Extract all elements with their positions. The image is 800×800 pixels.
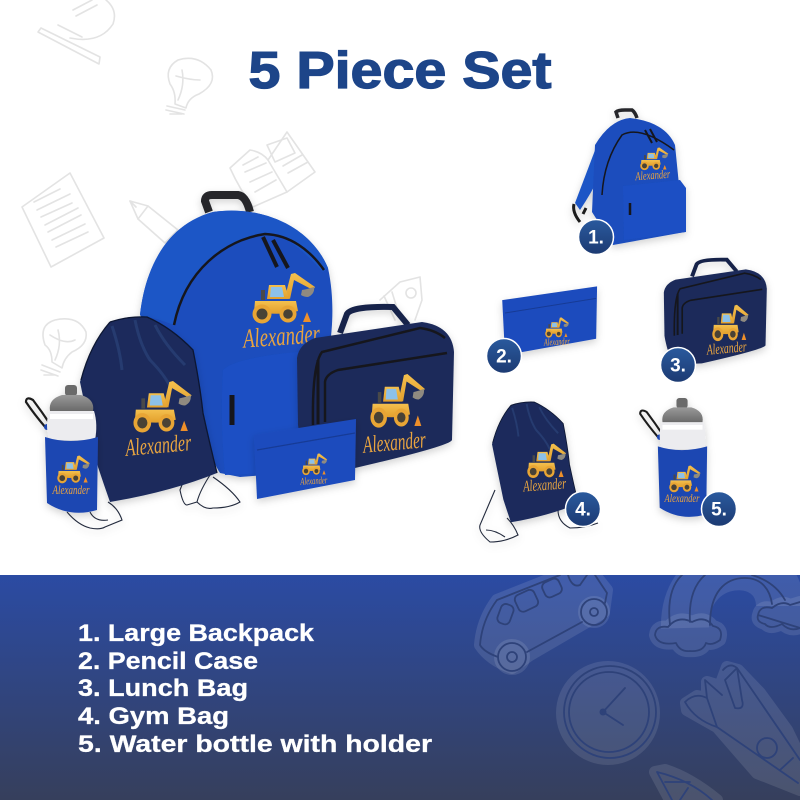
list of set items: 1. Large Backpack	[78, 620, 315, 647]
doodle: pencil	[130, 201, 178, 243]
doodle: paper sheet	[22, 173, 104, 267]
digger print	[669, 466, 700, 492]
number badge 1: 1.	[588, 228, 604, 248]
product 3: lunch bag	[660, 260, 767, 382]
name print: Alexander	[361, 427, 427, 459]
name print: Alexander	[664, 491, 700, 505]
product 2: pencil case	[486, 286, 597, 374]
list of set items	[78, 620, 432, 758]
number badge 4: 4.	[575, 500, 591, 520]
name print: Alexander	[299, 475, 328, 488]
product 5: water bottle	[640, 398, 736, 526]
digger print	[302, 453, 327, 475]
doodle: compass	[380, 277, 422, 320]
doodle: microscope	[38, 0, 114, 64]
doodle: light bulb top	[166, 58, 212, 114]
name print: Alexander	[543, 336, 570, 349]
bottom panel	[0, 575, 800, 800]
name print: Alexander	[634, 167, 671, 183]
doodle: open book	[230, 132, 315, 207]
number badge 4	[566, 492, 600, 526]
digger print	[545, 317, 569, 338]
name print: Alexander	[123, 430, 193, 462]
name print: Alexander	[52, 482, 90, 497]
backpack illustration	[574, 110, 686, 245]
gym bag	[80, 317, 240, 508]
digger print	[527, 444, 566, 478]
doodle: rocket	[685, 665, 800, 790]
name print: Alexander	[241, 318, 321, 354]
lunch bag	[297, 307, 454, 470]
doodle: clock	[556, 661, 660, 765]
digger print	[57, 456, 90, 483]
number badge 3: 3.	[670, 356, 686, 376]
product 4: gym bag	[480, 402, 600, 542]
digger print	[370, 374, 425, 428]
digger print	[712, 305, 749, 341]
panel background	[0, 575, 800, 800]
doodle: rainbow	[655, 566, 800, 651]
list of set items: 2. Pencil Case	[78, 648, 258, 675]
large backpack	[140, 195, 332, 477]
product 1: backpack	[574, 110, 686, 254]
number badge 2: 2.	[496, 346, 512, 368]
list of set items: 3. Lunch Bag	[78, 675, 248, 702]
pencil case	[254, 419, 356, 499]
digger print	[252, 273, 315, 324]
name print: Alexander	[705, 339, 747, 359]
gym bag illustration	[480, 402, 598, 542]
name print: Alexander	[522, 475, 567, 496]
doodle: school bus	[480, 575, 607, 671]
digger print	[133, 381, 192, 433]
water bottle with holder	[26, 385, 122, 529]
number badge 5: 5.	[711, 500, 727, 520]
doodle: pencil	[655, 770, 717, 800]
list of set items: 5. Water bottle with holder	[78, 731, 432, 758]
number badge 1	[578, 220, 614, 254]
list of set items: 4. Gym Bag	[78, 703, 229, 730]
title: 5 Piece Set	[248, 42, 552, 100]
doodle: light bulb left	[41, 319, 86, 376]
digger print	[640, 147, 668, 170]
set photo: all five products	[26, 195, 454, 529]
